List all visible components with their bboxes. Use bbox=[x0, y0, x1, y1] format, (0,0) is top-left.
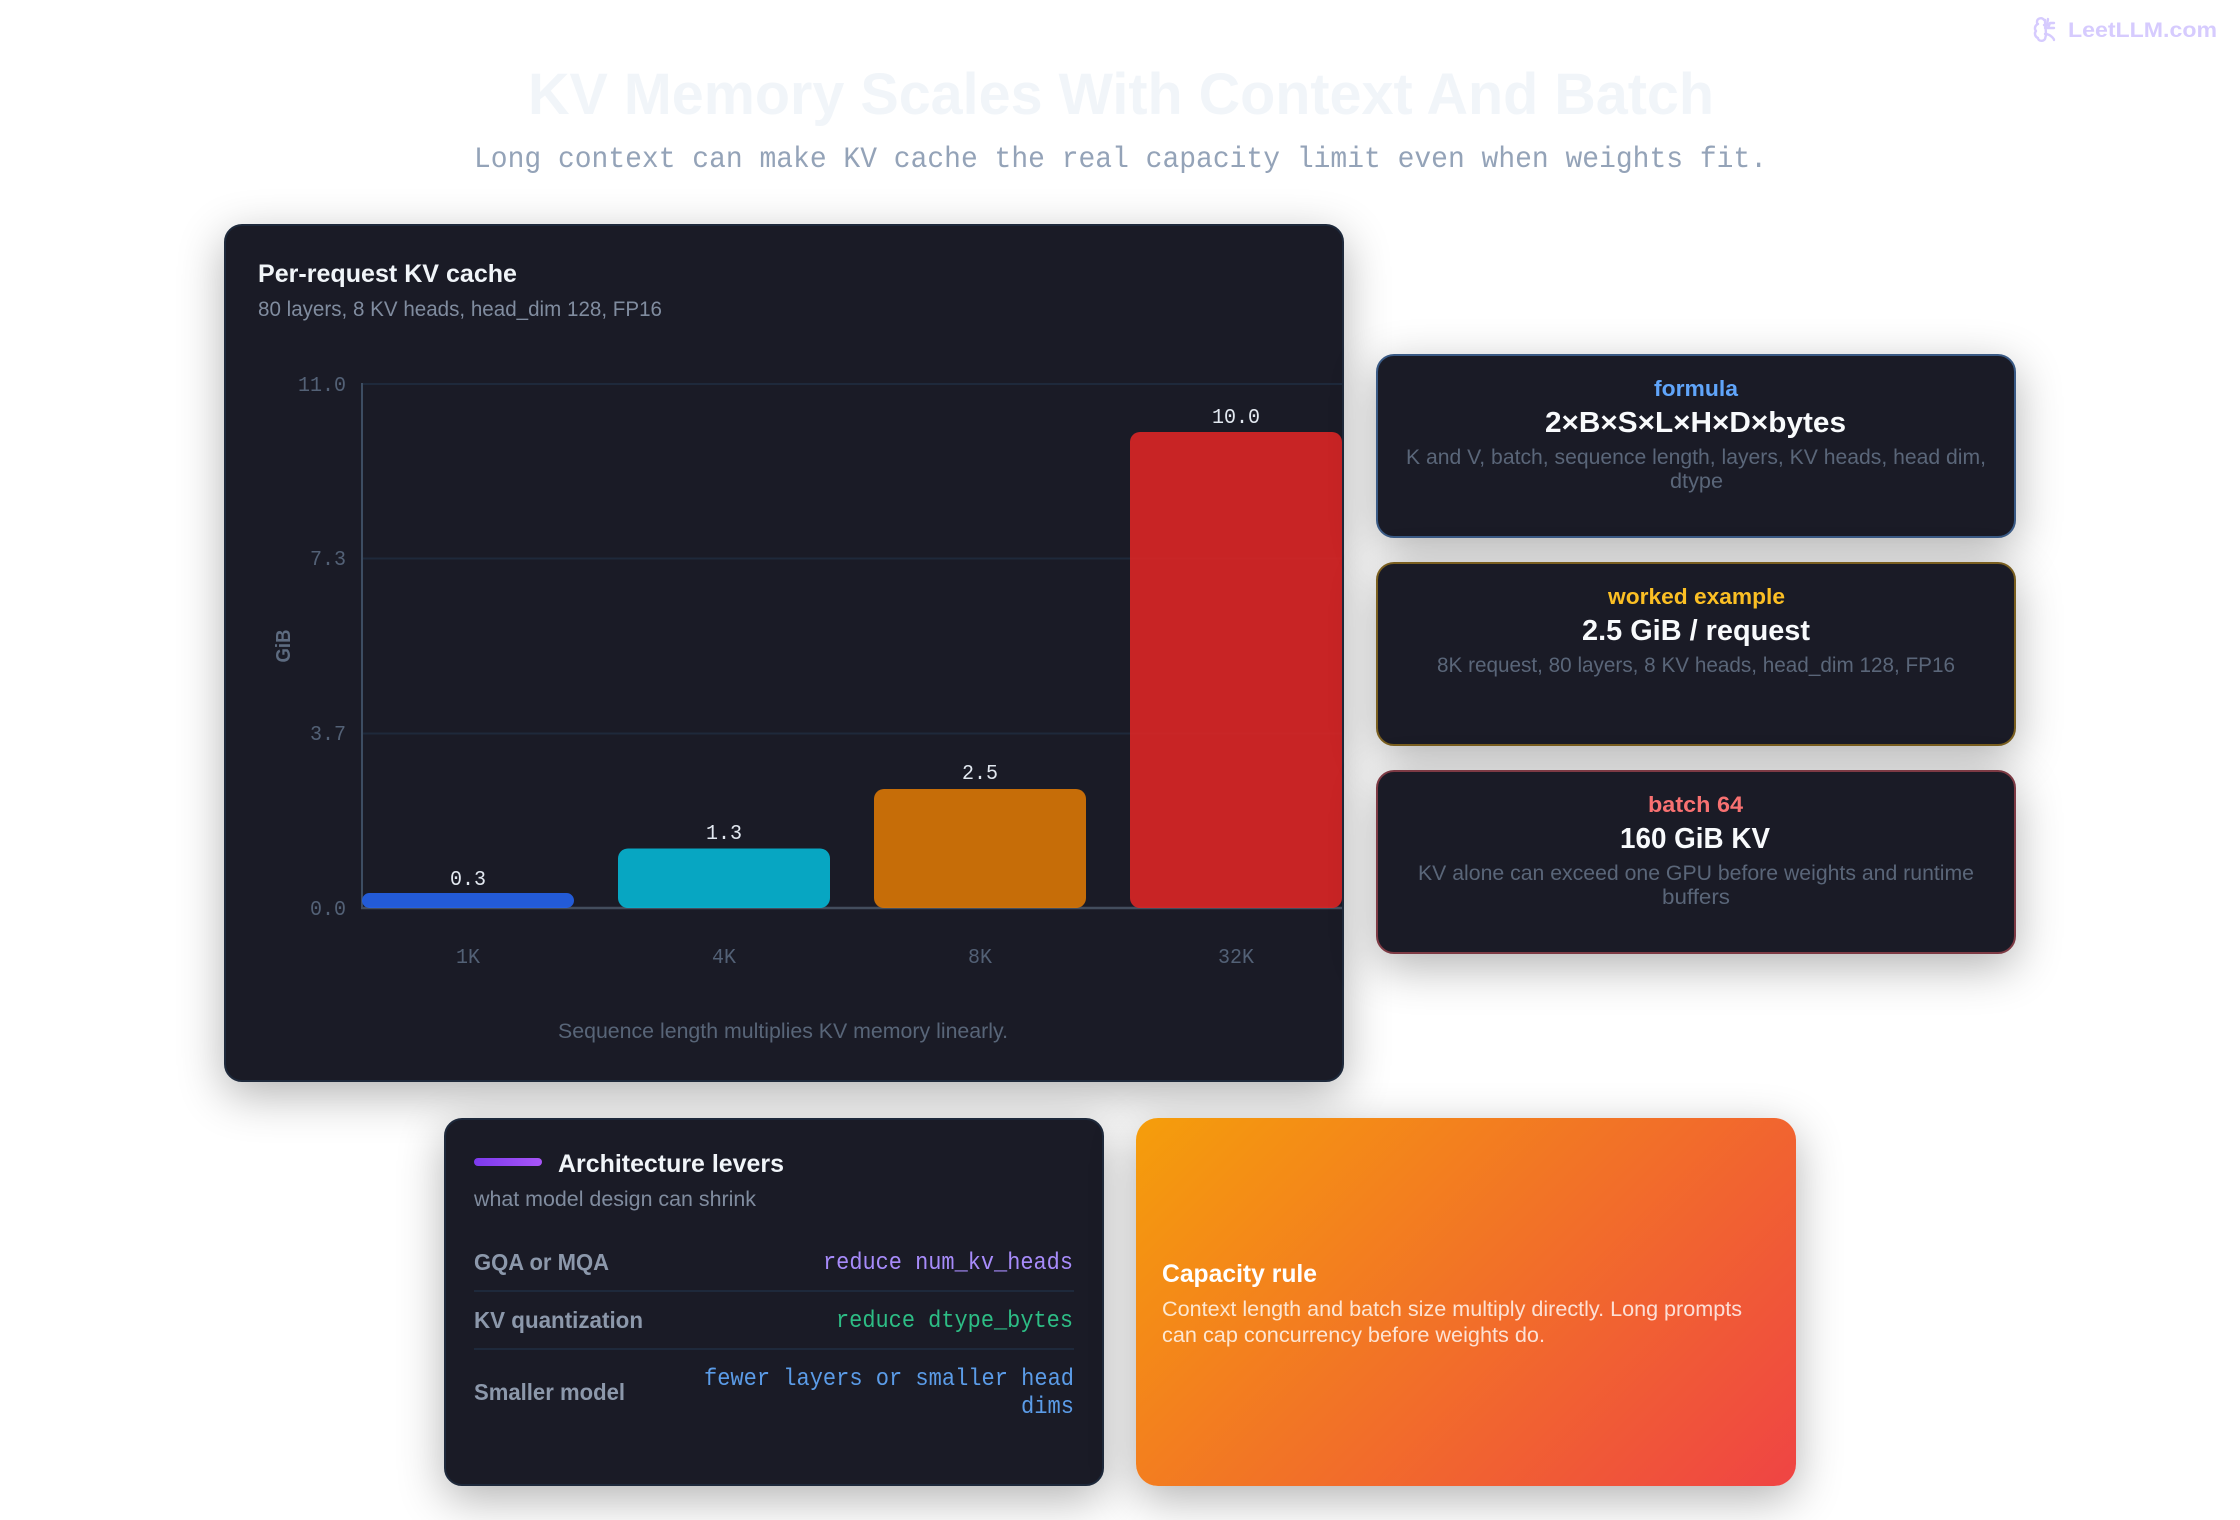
panel: architecture levers bbox=[444, 1118, 1104, 1486]
callout heading: Capacity rule bbox=[1162, 1260, 1317, 1288]
header: logo, title and subtitle bbox=[474, 17, 2217, 177]
y axis label: GiB bbox=[273, 630, 295, 662]
x axis labels: 8K bbox=[968, 947, 992, 970]
bar: 8K bbox=[874, 789, 1086, 908]
row: KV quantization bbox=[474, 1307, 1073, 1335]
panel heading: Architecture levers bbox=[558, 1150, 784, 1178]
batch description: KV alone can exceed one GPU before weights and runtime bbox=[1418, 862, 1974, 885]
bar: 1K bbox=[362, 893, 574, 908]
formula description: K and V, batch, sequence length, layers, KV heads, head dim, bbox=[1406, 446, 1986, 469]
chart subtitle: 80 layers, 8 KV heads, head_dim 128, FP16 bbox=[258, 298, 662, 321]
formula label: formula bbox=[1654, 376, 1739, 401]
batch description bbox=[1418, 862, 1974, 909]
panel: capacity rule callout bbox=[1136, 1118, 1796, 1486]
panel: batch 64 card bbox=[1376, 770, 2016, 954]
x axis labels bbox=[456, 947, 1254, 970]
x axis labels: 1K bbox=[456, 947, 480, 970]
x axis labels: 32K bbox=[1218, 947, 1254, 970]
batch value: 160 GiB KV bbox=[1620, 823, 1771, 855]
bar value labels: 10.0 bbox=[1212, 407, 1260, 430]
row: Smaller model: dims bbox=[1021, 1394, 1074, 1421]
subtitle: Long context can make KV cache the real capacity limit even when weights fit. bbox=[474, 143, 1767, 177]
icon: brain logo bbox=[2035, 18, 2054, 41]
row: Smaller model: fewer layers or smaller head bbox=[704, 1366, 1074, 1393]
title: KV Memory Scales With Context And Batch bbox=[528, 62, 1714, 127]
y axis ticks: 11.0 bbox=[298, 375, 346, 398]
panel: per-request KV cache chart bbox=[224, 224, 1344, 1082]
bar: 32K bbox=[1130, 432, 1342, 908]
formula description: dtype bbox=[1670, 470, 1723, 493]
chart caption: Sequence length multiplies KV memory linearly. bbox=[558, 1020, 1008, 1043]
y axis ticks: 7.3 bbox=[310, 549, 346, 572]
bar value labels: 1.3 bbox=[706, 823, 742, 846]
row: GQA or MQA: reduce num_kv_heads bbox=[823, 1250, 1073, 1277]
bar value labels bbox=[450, 407, 1260, 892]
panel: worked example card bbox=[1376, 562, 2016, 746]
formula value: 2×B×S×L×H×D×bytes bbox=[1545, 407, 1846, 439]
row: KV quantization: KV quantization bbox=[474, 1307, 643, 1333]
batch description: buffers bbox=[1662, 886, 1730, 909]
accent bar bbox=[474, 1158, 542, 1166]
row: GQA or MQA: GQA or MQA bbox=[474, 1249, 609, 1275]
chart title: Per-request KV cache bbox=[258, 260, 517, 288]
batch label: batch 64 bbox=[1648, 792, 1744, 817]
y axis ticks bbox=[298, 375, 346, 922]
x axis labels: 4K bbox=[712, 947, 736, 970]
row: Smaller model bbox=[474, 1366, 1074, 1421]
logo text: LeetLLM.com bbox=[2068, 19, 2217, 42]
callout text: can cap concurrency before weights do. bbox=[1162, 1324, 1545, 1347]
panel subheading: what model design can shrink bbox=[473, 1188, 757, 1211]
bar chart bbox=[273, 375, 1342, 970]
formula description bbox=[1406, 446, 1986, 493]
bar value labels: 2.5 bbox=[962, 763, 998, 786]
row: Smaller model: Smaller model bbox=[474, 1379, 625, 1405]
row: GQA or MQA bbox=[474, 1249, 1073, 1277]
worked example description: 8K request, 80 layers, 8 KV heads, head_dim 128, FP16 bbox=[1437, 654, 1955, 677]
panel: formula card bbox=[1376, 354, 2016, 538]
bar: 4K bbox=[618, 848, 830, 908]
row: KV quantization: reduce dtype_bytes bbox=[836, 1308, 1073, 1335]
y axis ticks: 0.0 bbox=[310, 899, 346, 922]
bar value labels: 0.3 bbox=[450, 869, 486, 892]
worked example value: 2.5 GiB / request bbox=[1582, 615, 1810, 647]
y axis ticks: 3.7 bbox=[310, 724, 346, 747]
callout text: Context length and batch size multiply directly. Long prompts bbox=[1162, 1298, 1742, 1321]
callout text bbox=[1162, 1298, 1742, 1347]
worked example label: worked example bbox=[1607, 584, 1785, 609]
